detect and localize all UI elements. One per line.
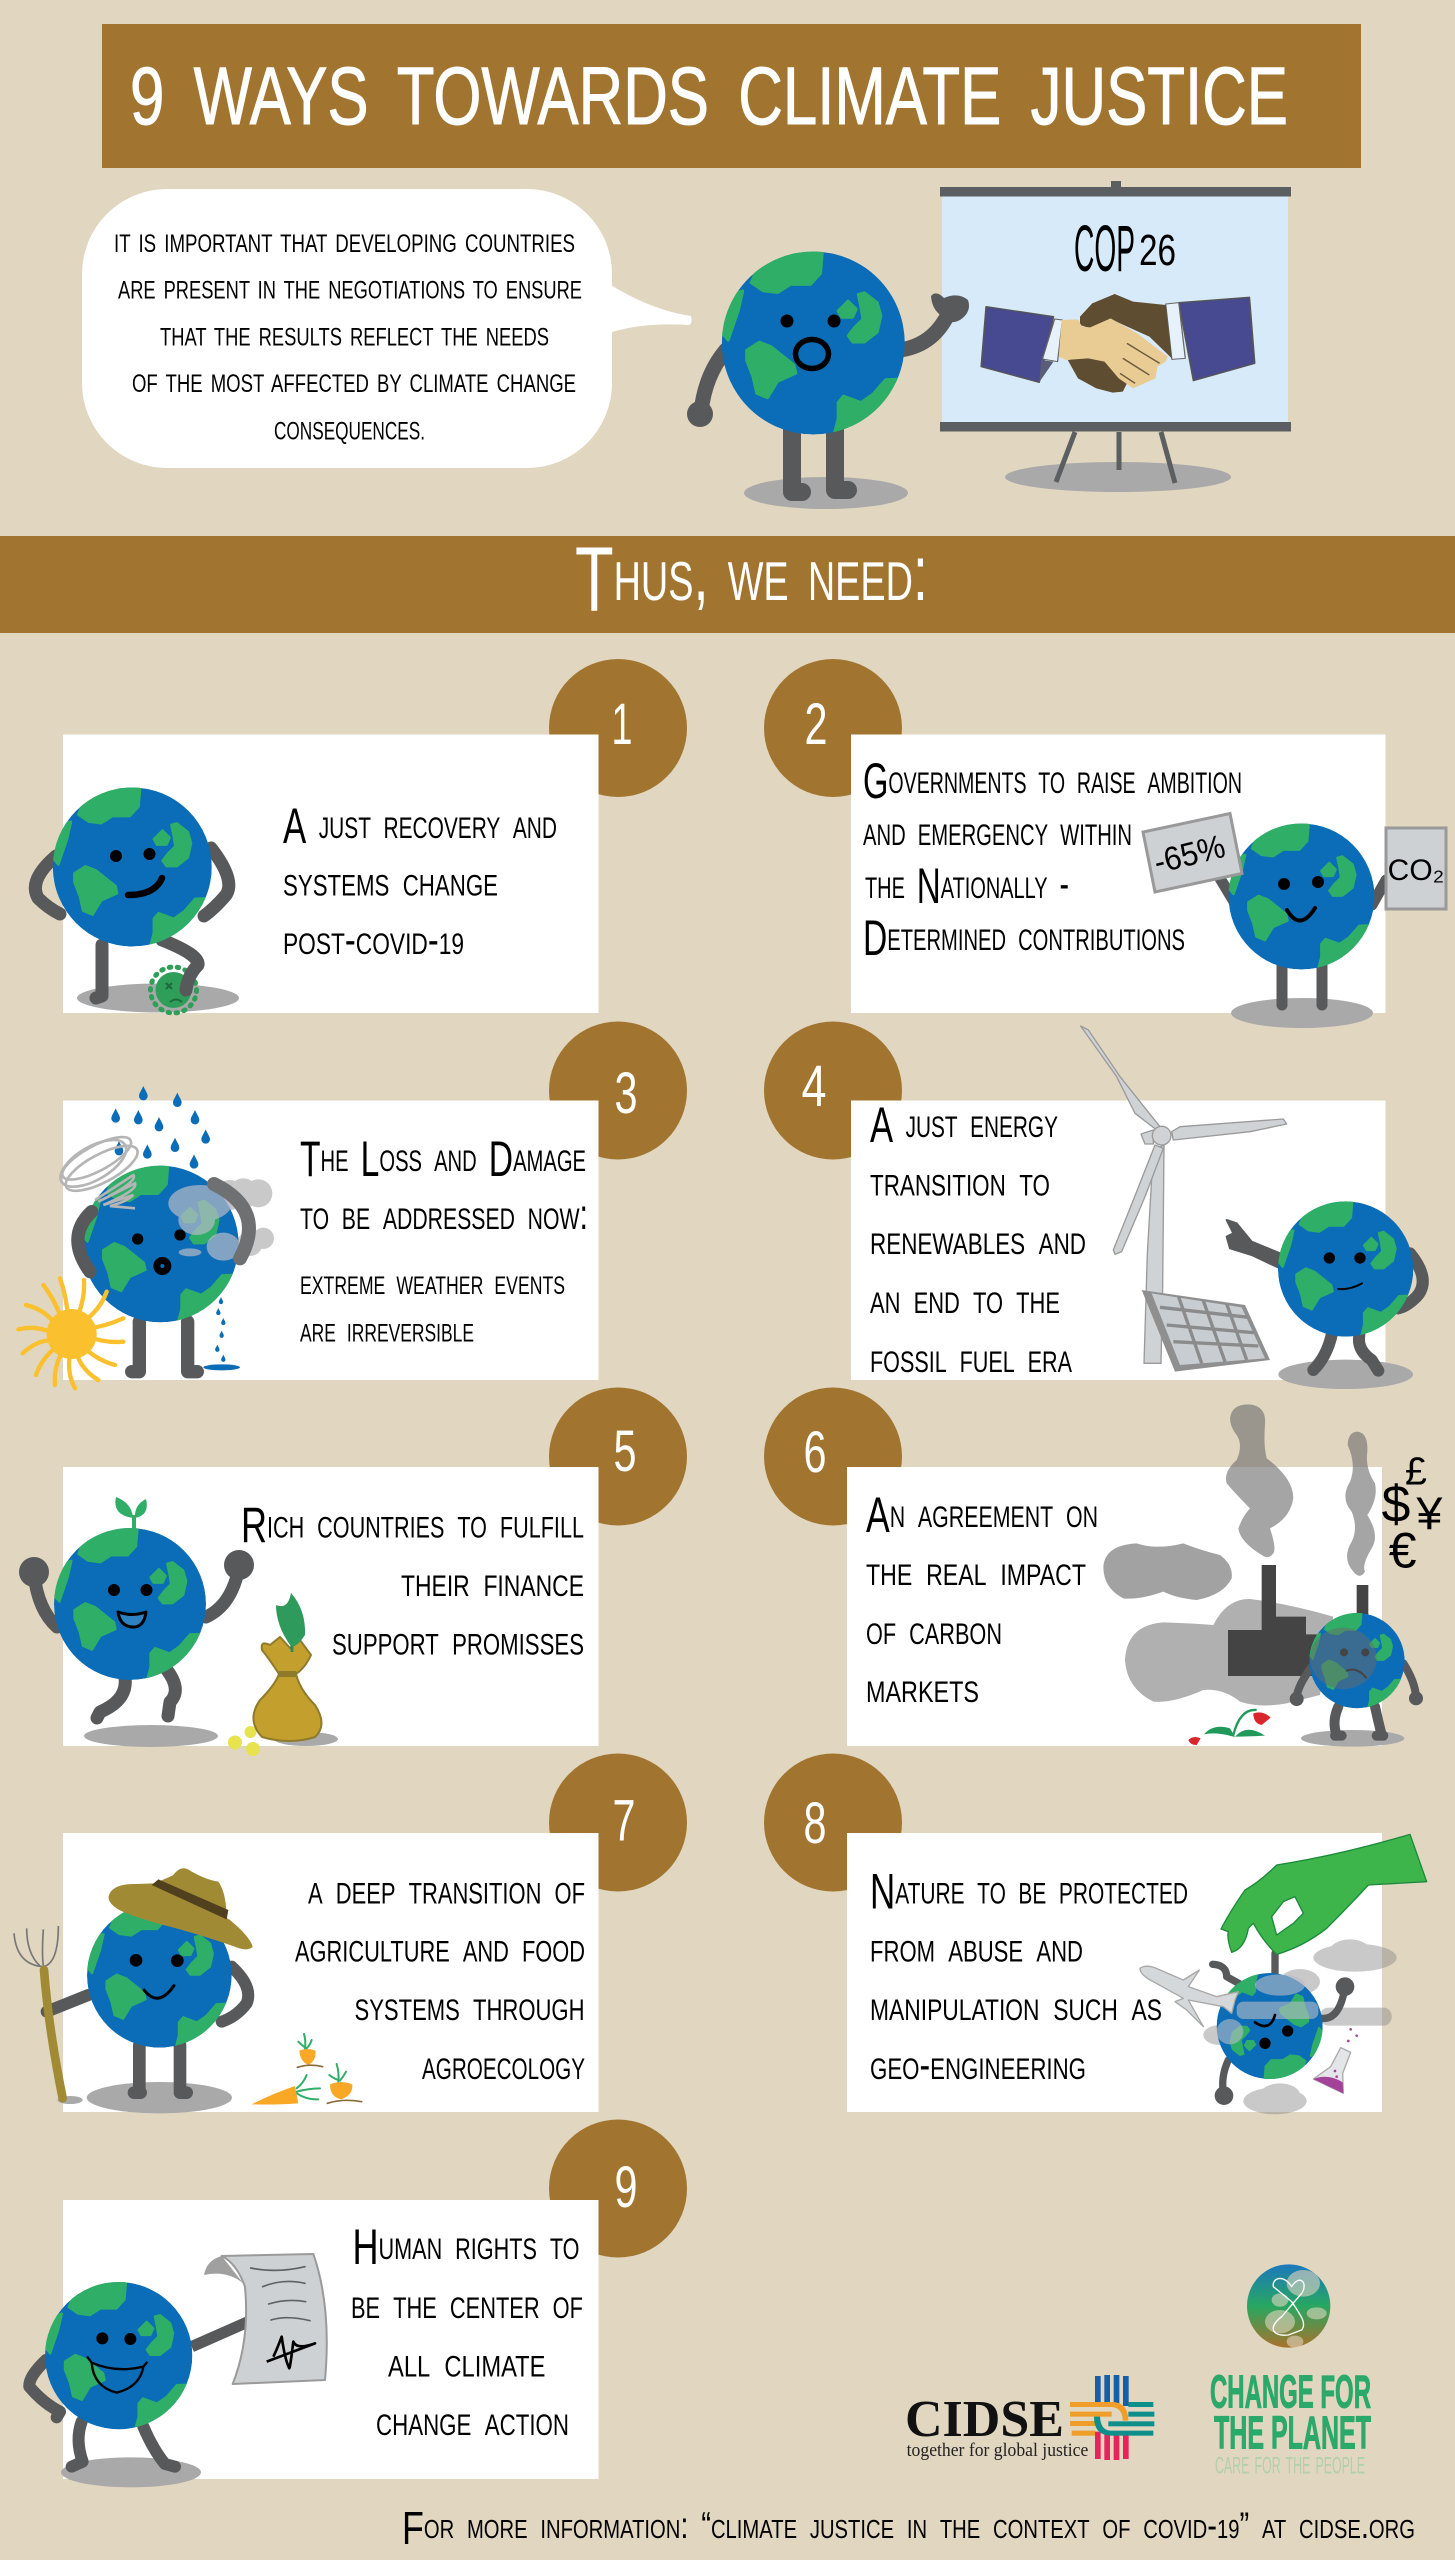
logo: Change for the Planet xyxy=(1210,2264,1371,2479)
text: item 7: agriculture and food xyxy=(295,1924,585,1972)
text: item 3: extreme weather events xyxy=(300,1263,565,1302)
text: item 4: transition to xyxy=(870,1158,1050,1206)
icon: document xyxy=(204,2254,327,2384)
currency symbols: £ xyxy=(1405,1449,1427,1493)
panel: item 2 xyxy=(764,659,1446,1028)
speech bubble text: THAT THE RESULTS REFLECT THE NEEDS xyxy=(160,324,549,352)
text: item 8: N xyxy=(870,1864,895,1920)
text: item 3: T xyxy=(300,1131,321,1187)
icon: airplane xyxy=(1140,1966,1238,2027)
text: item 1: systems change xyxy=(283,858,498,906)
icon: factory, smoke and sad earth xyxy=(1103,1404,1443,1747)
text: item 3: D xyxy=(489,1131,513,1187)
text: item 4: an end to the xyxy=(870,1275,1060,1323)
icon: factory xyxy=(1228,1565,1368,1676)
text: item 8: manipulation such as xyxy=(870,1982,1162,2030)
logo: CIDSE: CIDSE xyxy=(905,2391,1064,2448)
icon: pollution clouds xyxy=(1103,1404,1376,1705)
text: item 3: oss and xyxy=(379,1133,489,1181)
currency symbols: ¥ xyxy=(1415,1487,1443,1539)
text: item 1: just recovery and xyxy=(306,800,557,848)
text: item 2: D xyxy=(863,910,887,966)
COP26 label: COP xyxy=(1074,211,1135,285)
text: item 8: ature to be protected xyxy=(895,1866,1188,1914)
text: item 4: renewables and xyxy=(870,1216,1086,1264)
text: item 4 xyxy=(870,1097,1086,1382)
text: item 1 xyxy=(283,798,557,964)
icon: earth holding signed document xyxy=(29,2254,327,2487)
logo: CIDSE: together for global justice xyxy=(907,2440,1088,2461)
text: item 5: support promisses xyxy=(332,1616,584,1664)
currency symbols: $ xyxy=(1382,1475,1410,1533)
text: item 2: ationally - xyxy=(941,860,1069,908)
earth character presenting xyxy=(687,250,969,509)
text: item 5: their finance xyxy=(401,1558,584,1606)
text: item 6 xyxy=(866,1487,1098,1712)
sign: CO2: CO₂ xyxy=(1388,854,1444,887)
text: item 3 xyxy=(300,1131,588,1350)
title banner xyxy=(102,24,1361,168)
number 9: 9 xyxy=(614,2155,638,2220)
sign: -65%: -65% xyxy=(1150,827,1229,881)
text: item 3: are irreversible xyxy=(300,1310,474,1350)
text: item 4: just energy xyxy=(893,1099,1058,1147)
icon: carrots xyxy=(252,2034,362,2105)
text: item 5: R xyxy=(241,1498,267,1554)
speech bubble text: CONSEQUENCES. xyxy=(274,418,425,446)
number 4: 4 xyxy=(802,1054,826,1119)
icon: rain drops xyxy=(111,1086,210,1169)
text: item 3: he xyxy=(321,1133,361,1181)
icon: solar panel xyxy=(1142,1290,1270,1372)
text: item 2: etermined contributions xyxy=(887,912,1185,960)
speech bubble text: IT IS IMPORTANT THAT DEVELOPING COUNTRIES xyxy=(114,230,575,258)
section heading: T xyxy=(575,529,614,631)
sign: CO2 xyxy=(1386,828,1446,909)
icon: dripping puddle xyxy=(203,1297,240,1370)
text: item 4: fossil fuel era xyxy=(870,1334,1072,1382)
speech bubble xyxy=(82,189,692,468)
text: item 5: ich countries to fulfill xyxy=(267,1500,584,1548)
icon: hat xyxy=(109,1868,253,1949)
icon: hand manipulating earth xyxy=(1140,1834,1427,2114)
icon: wind turbine, solar panel and earth xyxy=(1081,1026,1423,1389)
text: item 3: to be addressed now: xyxy=(300,1191,588,1239)
text: item 3: amage xyxy=(513,1133,586,1181)
panel: item 9 xyxy=(29,2120,687,2487)
speech bubble text: ARE PRESENT IN THE NEGOTIATIONS TO ENSURE xyxy=(118,276,582,304)
icon: wilted flower xyxy=(1188,1710,1271,1745)
icon: money bag xyxy=(228,1593,338,1756)
text: item 9 xyxy=(351,2219,583,2445)
text: item 7: systems through xyxy=(354,1982,584,2030)
number 7: 7 xyxy=(612,1788,636,1854)
text: item 8: geo-engineering xyxy=(870,2041,1086,2089)
icon: pitchfork xyxy=(14,1926,63,2098)
number 1: 1 xyxy=(612,692,632,757)
icon: tornado xyxy=(53,1129,144,1208)
logo mark: globe xyxy=(1247,2264,1330,2348)
icon: handshake xyxy=(981,294,1255,393)
speech bubble text: OF THE MOST AFFECTED BY CLIMATE CHANGE xyxy=(132,370,576,398)
icon: green hand xyxy=(1221,1834,1427,1954)
text: item 2: overnments to raise ambition xyxy=(888,755,1242,803)
currency symbols xyxy=(1382,1449,1443,1578)
icon: sun xyxy=(18,1278,123,1388)
text: item 1: post-covid-19 xyxy=(283,916,464,964)
text: item 6: A xyxy=(866,1487,890,1543)
text: item 6: markets xyxy=(866,1664,979,1712)
COP26 label: 26 xyxy=(1139,226,1176,275)
text: item 6: of carbon xyxy=(866,1606,1002,1654)
number 6: 6 xyxy=(804,1420,826,1485)
logo: CIDSE xyxy=(905,2375,1154,2461)
icon: farmer earth xyxy=(14,1868,362,2113)
text: item 7 xyxy=(295,1866,585,2089)
logo mark: woven cross xyxy=(1070,2375,1154,2460)
icon: jumping earth with sprout xyxy=(19,1497,254,1747)
text: item 2: N xyxy=(917,858,941,914)
icon: earth with extreme weather xyxy=(18,1086,274,1388)
panel: item 5 xyxy=(19,1388,687,1756)
footer: source note: F xyxy=(402,2502,424,2554)
number 3: 3 xyxy=(614,1061,638,1126)
icon: wind turbine xyxy=(1081,1026,1287,1363)
text: item 2 xyxy=(863,753,1242,966)
panel: item 8 xyxy=(764,1754,1427,2114)
text: item 6: n agreement on xyxy=(890,1489,1098,1537)
text: item 8: from abuse and xyxy=(870,1924,1083,1972)
text: item 2: and emergency within xyxy=(863,807,1132,855)
text: item 9: all climate xyxy=(388,2338,546,2386)
panel: item 3 xyxy=(18,1022,687,1388)
panel: item 7 xyxy=(14,1754,687,2113)
text: item 9: be the center of xyxy=(351,2280,583,2328)
icon: sprout xyxy=(115,1497,147,1530)
section banner xyxy=(0,528,1455,633)
text: item 8 xyxy=(870,1864,1188,2089)
panel: item 1 xyxy=(35,659,687,1013)
number 8: 8 xyxy=(804,1791,826,1856)
text: item 9: H xyxy=(352,2219,379,2275)
text: item 5 xyxy=(241,1498,584,1664)
icon: flask xyxy=(1313,2028,1358,2093)
COP26 presentation screen xyxy=(940,181,1291,492)
number 5: 5 xyxy=(614,1419,636,1484)
text: item 2: G xyxy=(863,753,888,809)
number 2: 2 xyxy=(804,692,828,757)
text: item 2: the xyxy=(865,860,925,908)
panel: item 4 xyxy=(764,1022,1423,1389)
text: item 1: A xyxy=(283,798,307,854)
text: item 9: uman rights to xyxy=(379,2221,580,2269)
currency symbols: € xyxy=(1389,1522,1417,1578)
text: item 7: agroecology xyxy=(422,2041,585,2089)
icon: earth holding signs xyxy=(1143,814,1446,1028)
sign: -65% xyxy=(1143,814,1242,892)
text: item 6: the real impact xyxy=(866,1547,1086,1595)
text: item 3: L xyxy=(361,1131,379,1187)
panel: item 6 xyxy=(764,1388,1443,1747)
footer: source note: or more information: “climate justice in the context of covid- xyxy=(424,2504,1217,2546)
section heading: hus, we need: xyxy=(614,528,928,617)
text: item 4: A xyxy=(870,1097,894,1153)
text: item 7: a deep transition of xyxy=(308,1866,585,1914)
speech bubble text xyxy=(114,230,582,446)
text: item 9: change action xyxy=(376,2397,569,2445)
icon: earth stepping on virus xyxy=(35,786,239,1013)
